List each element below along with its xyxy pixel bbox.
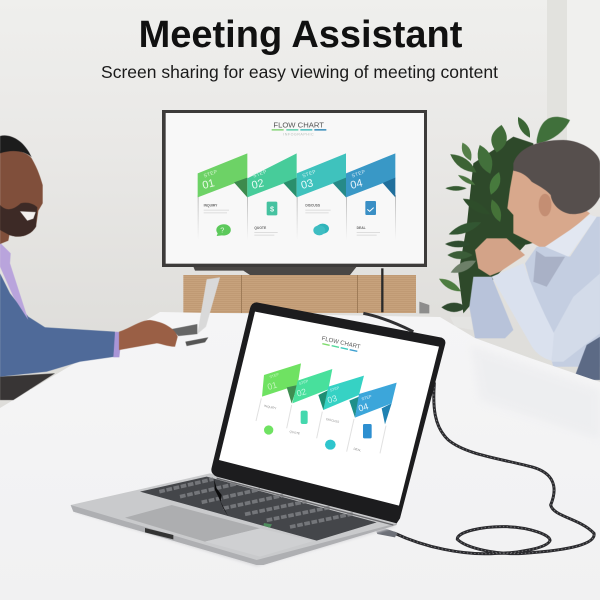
neck and face: [507, 167, 590, 250]
screen step 3: 03: [326, 393, 338, 405]
tv step 4: 04: [349, 177, 364, 192]
cuff: [113, 332, 122, 357]
tv step 4: DEAL: [357, 226, 366, 230]
table: [0, 312, 600, 600]
table reflection: [470, 345, 600, 440]
laptop lid: [211, 302, 445, 523]
tv with flow chart: [162, 110, 427, 275]
chair: [0, 373, 55, 400]
tv bezel: [162, 110, 427, 267]
screen step 4: [353, 383, 397, 452]
tv step 1: INQUIRY: [204, 203, 218, 207]
screen chart title: FLOW CHART: [321, 336, 361, 351]
tv screen: [166, 113, 424, 264]
cable: [375, 383, 594, 554]
tv chart title: FLOW CHART: [273, 120, 324, 129]
shirt collar: [537, 215, 597, 257]
tv step 3: [297, 153, 346, 235]
clasped hands: [475, 238, 525, 276]
phone on table: [185, 337, 208, 346]
screen step 4: 04: [357, 401, 369, 414]
plant: [437, 115, 570, 330]
upper arm: [552, 273, 600, 362]
tv step 1: STEP: [203, 169, 219, 180]
ear: [539, 194, 551, 216]
tv step 3: DISCUSS: [305, 203, 321, 207]
screen step 2: [289, 369, 332, 436]
placket: [533, 251, 565, 287]
screen step 3: DISCUSS: [326, 417, 340, 424]
hair: [513, 140, 600, 214]
screen step dividers: [256, 398, 386, 453]
screen step 2: 02: [295, 386, 308, 399]
shirt: [0, 243, 28, 320]
laptop base: [71, 473, 397, 565]
usb-c connector: [375, 527, 397, 537]
screen step 2: QUOTE: [289, 429, 300, 436]
tv step columns: [198, 195, 396, 240]
dark chair back: [573, 337, 600, 380]
tv step 3: STEP: [302, 169, 317, 180]
tv step 1: 01: [201, 177, 216, 192]
tv step 2: QUOTE: [254, 226, 267, 230]
screen step 3: [323, 376, 364, 450]
subtitle: Screen sharing for easy viewing of meeting content: [101, 62, 498, 82]
screen step 1: INQUIRY: [264, 404, 277, 410]
screen step 3: STEP: [329, 386, 340, 393]
laptop screen: [219, 312, 439, 506]
screen step 1: STEP: [269, 372, 280, 379]
tv chart subtitle: INFOGRAPHIC: [283, 133, 314, 137]
tv step 1: [198, 153, 247, 236]
tv step 4: [346, 153, 395, 236]
tv step 2: [247, 153, 297, 236]
teeth: [20, 211, 36, 221]
tv step 4: STEP: [351, 169, 367, 180]
screen step 2: STEP: [298, 379, 309, 386]
head: [0, 150, 43, 244]
screen step 1: [262, 363, 301, 435]
tv step 2: $: [270, 204, 274, 213]
tv step 2: 02: [250, 177, 265, 192]
keyboard: [140, 477, 377, 541]
jacket: [0, 273, 115, 377]
cable behind lid: [363, 313, 413, 332]
screen step 1: 01: [266, 380, 278, 392]
shirt torso: [525, 217, 600, 367]
wall pillar: [547, 0, 567, 150]
left man: [0, 135, 220, 400]
tv step 1: ?: [220, 225, 224, 234]
screen step 4: STEP: [361, 394, 373, 401]
beard: [0, 203, 37, 237]
laptop shadow: [73, 475, 397, 567]
laptop: [71, 302, 445, 567]
tv step 3: 03: [300, 177, 315, 192]
hair: [0, 135, 32, 157]
forearm: [492, 263, 554, 361]
wood cabinet: [183, 268, 429, 313]
notch: [145, 528, 173, 539]
right man: [469, 140, 600, 380]
hinge strip: [217, 478, 393, 525]
tv stand: [193, 267, 357, 275]
screen step 4: DEAL: [353, 447, 362, 452]
hand: [119, 320, 178, 350]
tv step 2: STEP: [252, 169, 268, 180]
right wall section: [567, 0, 600, 200]
far sleeve: [469, 277, 513, 338]
title: Meeting Assistant: [139, 14, 463, 56]
small laptop: [172, 277, 220, 336]
screen title colour bars: [322, 344, 357, 351]
tv title colour bars: [272, 129, 326, 131]
